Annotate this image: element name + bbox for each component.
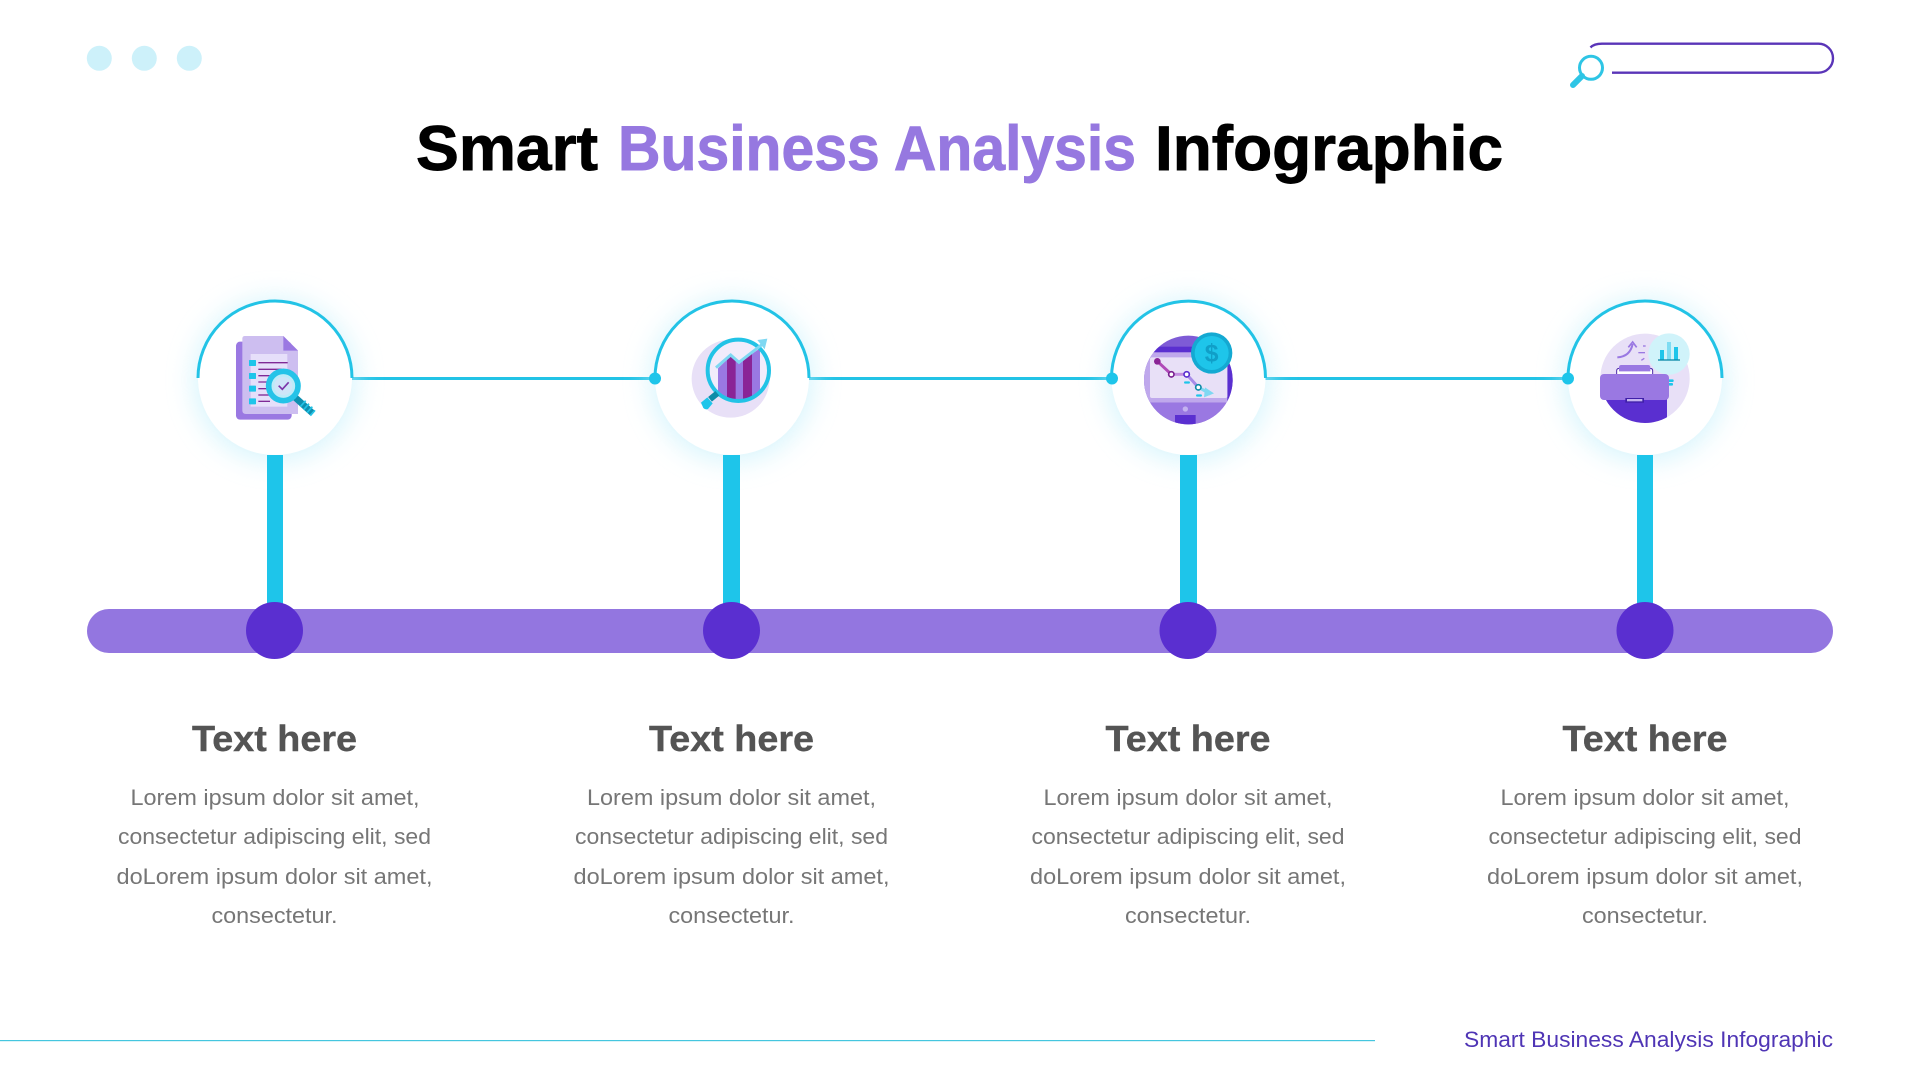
step 1 heading: Text here [192, 718, 357, 759]
step 2 body [574, 785, 890, 928]
step 1 node circle [193, 298, 357, 462]
step 4 [1487, 298, 1803, 928]
step 4 body [1487, 785, 1803, 928]
footer rule [0, 1040, 1375, 1041]
step 3 body: consectetur. [1125, 903, 1251, 928]
icon: monitor with falling chart and coin [1143, 332, 1233, 426]
connector lines [352, 377, 1568, 380]
step 4 body: Lorem ipsum dolor sit amet, [1500, 785, 1790, 810]
step 3 stem [1180, 455, 1197, 615]
step 1 body: doLorem ipsum dolor sit amet, [116, 864, 432, 889]
step 2 node circle [649, 298, 814, 462]
step 4 marker [1616, 602, 1674, 659]
step 3 node circle [1106, 298, 1270, 462]
step 3 body [1030, 785, 1346, 928]
step 2 [574, 298, 890, 928]
footer text: Smart Business Analysis Infographic [1464, 1027, 1833, 1052]
title: Business Analysis [618, 114, 1136, 184]
step 3 marker [1160, 602, 1216, 659]
step 4 body: doLorem ipsum dolor sit amet, [1487, 864, 1803, 889]
icon: document with magnifier [236, 336, 315, 420]
step 3 body: consectetur adipiscing elit, sed [1032, 824, 1344, 849]
timeline bar [87, 609, 1833, 653]
step 1 [116, 298, 432, 928]
title: Smart [416, 114, 598, 184]
icon: magnifier with bar chart [692, 339, 770, 418]
step 2 body: Lorem ipsum dolor sit amet, [587, 785, 876, 810]
icon: briefcase with chart bubble [1600, 333, 1690, 425]
step 2 body: consectetur. [668, 903, 794, 928]
step 4 body: consectetur adipiscing elit, sed [1488, 824, 1802, 849]
step 1 body [116, 785, 432, 928]
icon: monitor with falling chart and coin: $ [1205, 341, 1219, 368]
step 1 body: consectetur. [212, 903, 338, 928]
step 2 heading: Text here [649, 718, 814, 759]
step 1 stem [267, 455, 283, 615]
step 4 stem [1637, 455, 1653, 615]
step 3 heading: Text here [1106, 718, 1270, 759]
step 1 marker [246, 602, 303, 659]
step 1 body: Lorem ipsum dolor sit amet, [130, 785, 420, 810]
step 4 node circle [1562, 298, 1727, 462]
step 1 body: consectetur adipiscing elit, sed [118, 824, 431, 849]
step 4 body: consectetur. [1582, 903, 1708, 928]
window dots [87, 46, 202, 71]
step 3 body: Lorem ipsum dolor sit amet, [1044, 785, 1332, 810]
step 2 stem [723, 455, 740, 615]
step 3 body: doLorem ipsum dolor sit amet, [1030, 864, 1346, 889]
step 2 body: doLorem ipsum dolor sit amet, [574, 864, 890, 889]
title [416, 114, 1503, 184]
title: Infographic [1155, 114, 1503, 184]
step 2 marker [703, 602, 760, 659]
step 3 [1030, 298, 1346, 928]
search bar icon [1573, 44, 1833, 85]
step 4 heading: Text here [1562, 718, 1728, 759]
step 2 body: consectetur adipiscing elit, sed [575, 824, 888, 849]
